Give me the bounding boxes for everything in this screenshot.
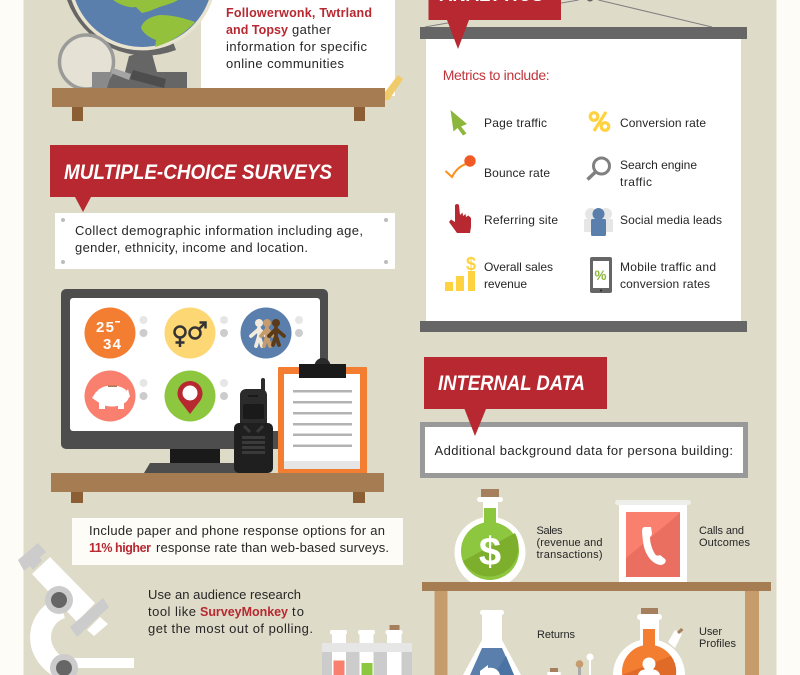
section: multiple-choice surveys: [18, 145, 412, 675]
metric: overall sales revenue: $: [466, 254, 476, 274]
label: sales: transactions): [536, 549, 602, 561]
label: user profiles: User: [699, 626, 722, 638]
metric: page traffic: Page traffic: [484, 116, 547, 130]
text block: SurveyMonkey tip: SurveyMonkey: [200, 605, 288, 619]
board: metrics: [420, 27, 747, 332]
flask: sales: [454, 489, 526, 582]
heading: multiple-choice surveys: MULTIPLE-CHOICE SURVEYS: [64, 161, 332, 184]
callout: response rate: response rate than web-based surveys.: [156, 540, 389, 555]
icon: ethnicity figures: [240, 308, 292, 358]
metric: mobile traffic and conversion rates: [590, 257, 716, 293]
metric: mobile traffic and conversion rates: conversion rates: [620, 277, 710, 291]
metric: search engine traffic: [588, 158, 697, 189]
icon: gender: [164, 308, 216, 358]
metric: bounce rate: [446, 155, 550, 180]
text panel: background data: [420, 422, 748, 478]
icon: location pin: [164, 370, 216, 422]
metric: conversion rate: Conversion rate: [620, 116, 706, 130]
label: calls and outcomes: [699, 525, 750, 549]
metric: conversion rate: [590, 112, 706, 131]
illustration: monitor with survey options: [61, 289, 328, 473]
section: internal data: [420, 357, 771, 675]
flask: user profiles: [613, 608, 685, 675]
shelf: [51, 473, 384, 503]
text panel: community tools: [201, 0, 395, 96]
text block: SurveyMonkey tip: tool like: [148, 604, 196, 619]
text panel: demographic information: Collect demographic information including age,: [75, 223, 363, 238]
text block: SurveyMonkey tip: Use an audience research: [148, 587, 301, 602]
label: user profiles: Profiles: [699, 638, 736, 650]
metric: referring site: Referring site: [484, 213, 558, 227]
callout: response rate: 11% higher: [89, 541, 151, 555]
table: [422, 582, 771, 675]
text panel: demographic information: gender, ethnicity, income and location.: [75, 240, 308, 255]
text panel: community tools: and Topsy: [226, 23, 288, 37]
section: analytics: [420, 0, 747, 332]
illustration: test tube rack: [322, 625, 412, 675]
metric: overall sales revenue: [445, 254, 553, 291]
label: sales: Sales: [536, 525, 563, 537]
shelf: [52, 88, 385, 121]
icon: clipboard: [278, 358, 367, 474]
metric: referring site: [449, 204, 558, 233]
metric: overall sales revenue: revenue: [484, 277, 527, 291]
text panel: community tools: information for specific: [226, 39, 368, 54]
text panel: community tools: gather: [292, 22, 332, 37]
nail: [587, 0, 593, 2]
metric: search engine traffic: Search engine: [620, 158, 697, 172]
icon: telephone handset: [234, 378, 273, 473]
icon: age range: 34: [103, 336, 122, 353]
metric: bounce rate: Bounce rate: [484, 166, 550, 180]
hanging wires: [425, 0, 712, 27]
answer dots: [140, 316, 303, 400]
metric: overall sales revenue: Overall sales: [484, 260, 553, 274]
heading: internal data: INTERNAL DATA: [438, 372, 585, 395]
metric: page traffic: [450, 110, 547, 136]
label: calls and outcomes: Outcomes: [699, 537, 750, 549]
icon: pencil: [385, 75, 403, 100]
callout: response rate: Include paper and phone response options for an: [89, 523, 385, 538]
icon: age range: 25: [96, 319, 114, 336]
label: returns: Returns: [537, 629, 576, 641]
heading: internal data: [424, 357, 607, 436]
metric: social media leads: Social media leads: [620, 213, 722, 227]
label: sales: [536, 525, 602, 561]
text panel: background data: Additional background data for persona building:: [434, 443, 733, 458]
text panel: community tools: online communities: [226, 56, 344, 71]
text panel: demographic information: [55, 213, 395, 269]
metric: mobile traffic and conversion rates: Mobile traffic and: [620, 260, 716, 274]
jar: calls and outcomes: [615, 500, 691, 582]
text panel: community tools: Followerwonk, Twtrland: [226, 6, 372, 20]
text block: SurveyMonkey tip: get the most out of polling.: [148, 621, 313, 636]
callout: response rate: [72, 518, 403, 565]
label: user profiles: [699, 626, 736, 650]
heading: analytics: [428, 0, 561, 49]
label: calls and outcomes: Calls and: [699, 525, 744, 537]
section: online community tools: [52, 0, 403, 121]
icon: globe: [67, 0, 212, 88]
flask: sales: $: [479, 530, 501, 574]
icon: magnifying glass: [60, 35, 166, 89]
icon: piggy bank income: [84, 370, 136, 422]
flask: returns: [463, 610, 521, 675]
text block: SurveyMonkey tip: [148, 587, 313, 636]
icon: age range: [84, 308, 136, 358]
heading: multiple-choice surveys: [50, 145, 348, 212]
metric: search engine traffic: traffic: [620, 175, 652, 189]
label: sales: (revenue and: [536, 537, 602, 549]
metrics subheading: Metrics to include:: [443, 67, 550, 83]
illustration: microscope: [18, 543, 134, 675]
metric: social media leads: [584, 208, 722, 236]
text block: SurveyMonkey tip: to: [292, 604, 304, 619]
small bottles and swabs: [547, 654, 594, 675]
metric: mobile traffic and conversion rates: %: [594, 268, 607, 283]
